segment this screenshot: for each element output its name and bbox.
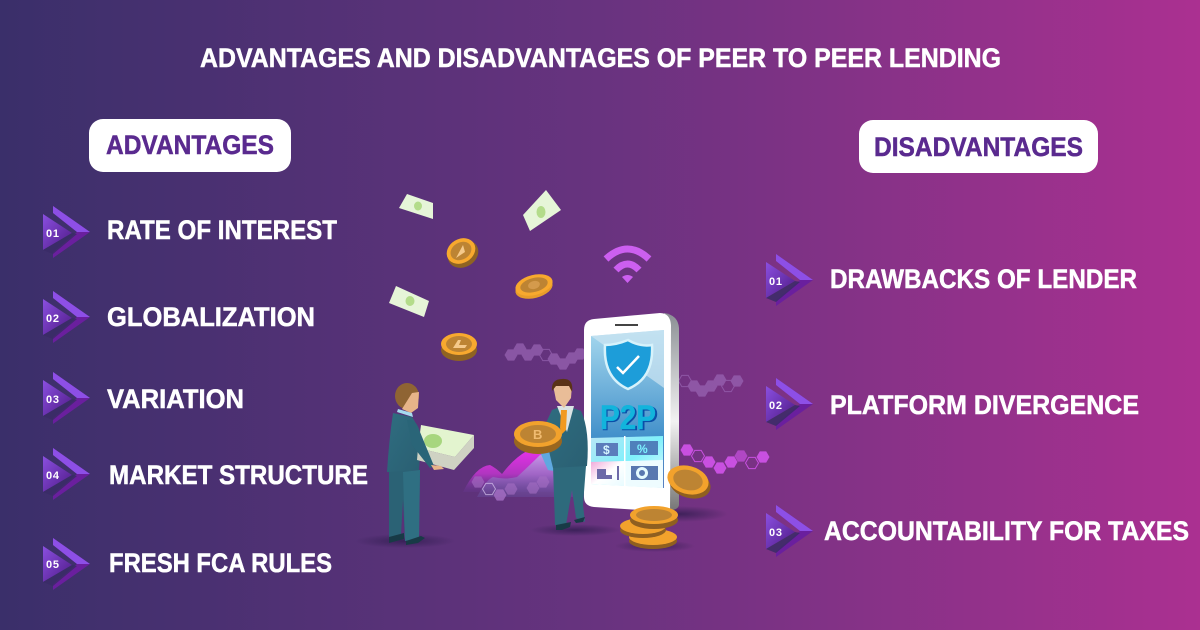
title: ADVANTAGES AND DISADVANTAGES OF PEER TO PEER LENDING: [200, 43, 1001, 73]
advantage 04: market structure: MARKET STRUCTURE: [109, 460, 368, 490]
advantage 05: fresh fca rules: [43, 538, 332, 590]
advantage 05: fresh fca rules: FRESH FCA RULES: [109, 548, 332, 578]
illustration: flying coins: [441, 233, 555, 361]
bitcoin coin: [514, 421, 562, 454]
advantage 01: rate of interest: 01: [46, 228, 59, 240]
advantage 02: globalization: GLOBALIZATION: [107, 302, 315, 332]
disadvantage 01: drawbacks of lender: 01: [769, 276, 782, 288]
icon: wifi: [606, 249, 649, 283]
illustration: shadows: [355, 506, 728, 552]
advantage 03: variation: VARIATION: [107, 384, 244, 414]
disadvantage 02: platform divergence: PLATFORM DIVERGENCE: [830, 390, 1139, 420]
panel: disadvantages heading: [859, 120, 1098, 173]
hexagon chain: lower: [680, 444, 770, 474]
advantage 03: variation: 03: [46, 394, 59, 406]
phone tiles: %: [637, 442, 648, 456]
advantage 01: rate of interest: RATE OF INTEREST: [107, 215, 337, 245]
advantage 02: globalization: [43, 291, 315, 343]
hexagon chain: upper: [504, 343, 744, 397]
p2p label: P2P: [601, 400, 658, 438]
disadvantage 02: platform divergence: [766, 378, 1139, 430]
panel: advantages heading: ADVANTAGES: [106, 130, 274, 160]
panel: advantages heading: [89, 119, 291, 172]
illustration: flying bills: [389, 190, 561, 317]
disadvantage 02: platform divergence: 02: [769, 400, 782, 412]
illustration: smartphone: [584, 313, 679, 512]
icon: shield: [605, 340, 652, 389]
illustration: person holding cash stack: [387, 383, 474, 545]
bitcoin coin: B: [533, 427, 542, 442]
illustration: coins near phone: [620, 461, 714, 549]
advantage 01: rate of interest: [43, 206, 337, 258]
advantage 04: market structure: [43, 448, 368, 500]
disadvantage 03: accountability for taxes: [766, 505, 1189, 557]
panel: disadvantages heading: DISADVANTAGES: [874, 132, 1083, 162]
illustration: smartphone: P2P: [600, 399, 656, 437]
disadvantage 01: drawbacks of lender: DRAWBACKS OF LENDER: [830, 264, 1137, 294]
disadvantage 01: drawbacks of lender: [766, 254, 1137, 306]
illustration: person holding bitcoin: [514, 379, 588, 530]
disadvantage 03: accountability for taxes: 03: [769, 527, 782, 539]
advantage 05: fresh fca rules: 05: [46, 559, 59, 571]
arm and hand: [407, 420, 444, 470]
advantage 02: globalization: 02: [46, 313, 59, 325]
advantage 03: variation: [43, 372, 244, 424]
cash stack: [417, 425, 474, 470]
phone tiles: $: [603, 443, 610, 457]
phone tiles: [591, 436, 663, 488]
illustration: wave chart: [463, 447, 585, 501]
advantage 04: market structure: 04: [46, 470, 60, 482]
